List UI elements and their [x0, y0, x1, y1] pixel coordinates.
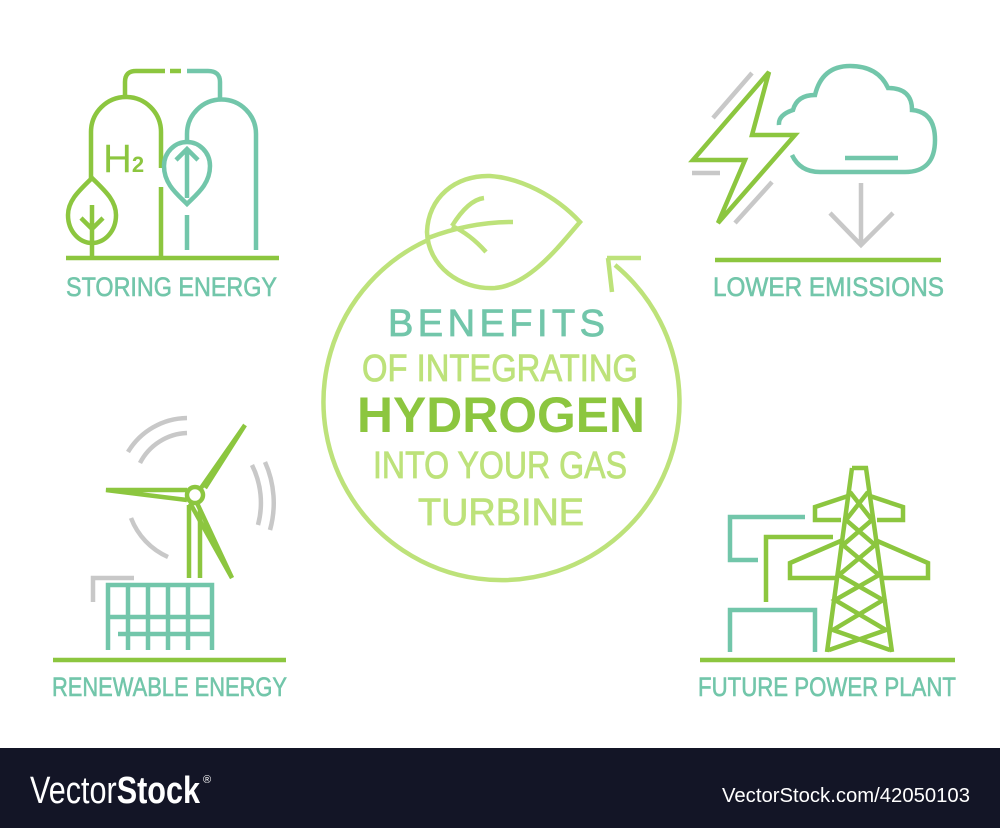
- label: renewable energy: RENEWABLE ENERGY: [52, 672, 287, 702]
- center title text: HYDROGEN: [357, 387, 645, 443]
- label: lower emissions: LOWER EMISSIONS: [713, 272, 944, 302]
- footer bar: ®: [203, 774, 211, 786]
- center title text: INTO YOUR GAS: [373, 445, 627, 487]
- center title text: TURBINE: [418, 492, 584, 534]
- center title text: OF INTEGRATING: [362, 348, 638, 390]
- footer bar: [0, 748, 1000, 828]
- center title text: BENEFITS: [388, 303, 614, 345]
- icon: lower emissions: [692, 66, 941, 260]
- center: circular arrow with leaf: [323, 176, 679, 580]
- icon: renewable energy: [53, 418, 286, 660]
- icon: storing energy: [66, 71, 279, 258]
- label: storing energy: STORING ENERGY: [66, 272, 277, 302]
- H2 label: H2: [103, 137, 144, 181]
- footer bar: VectorStock.com/42050103: [722, 785, 970, 807]
- center title text: [357, 303, 645, 534]
- footer bar: VectorStock: [30, 770, 201, 812]
- icon: future power plant: [700, 468, 955, 660]
